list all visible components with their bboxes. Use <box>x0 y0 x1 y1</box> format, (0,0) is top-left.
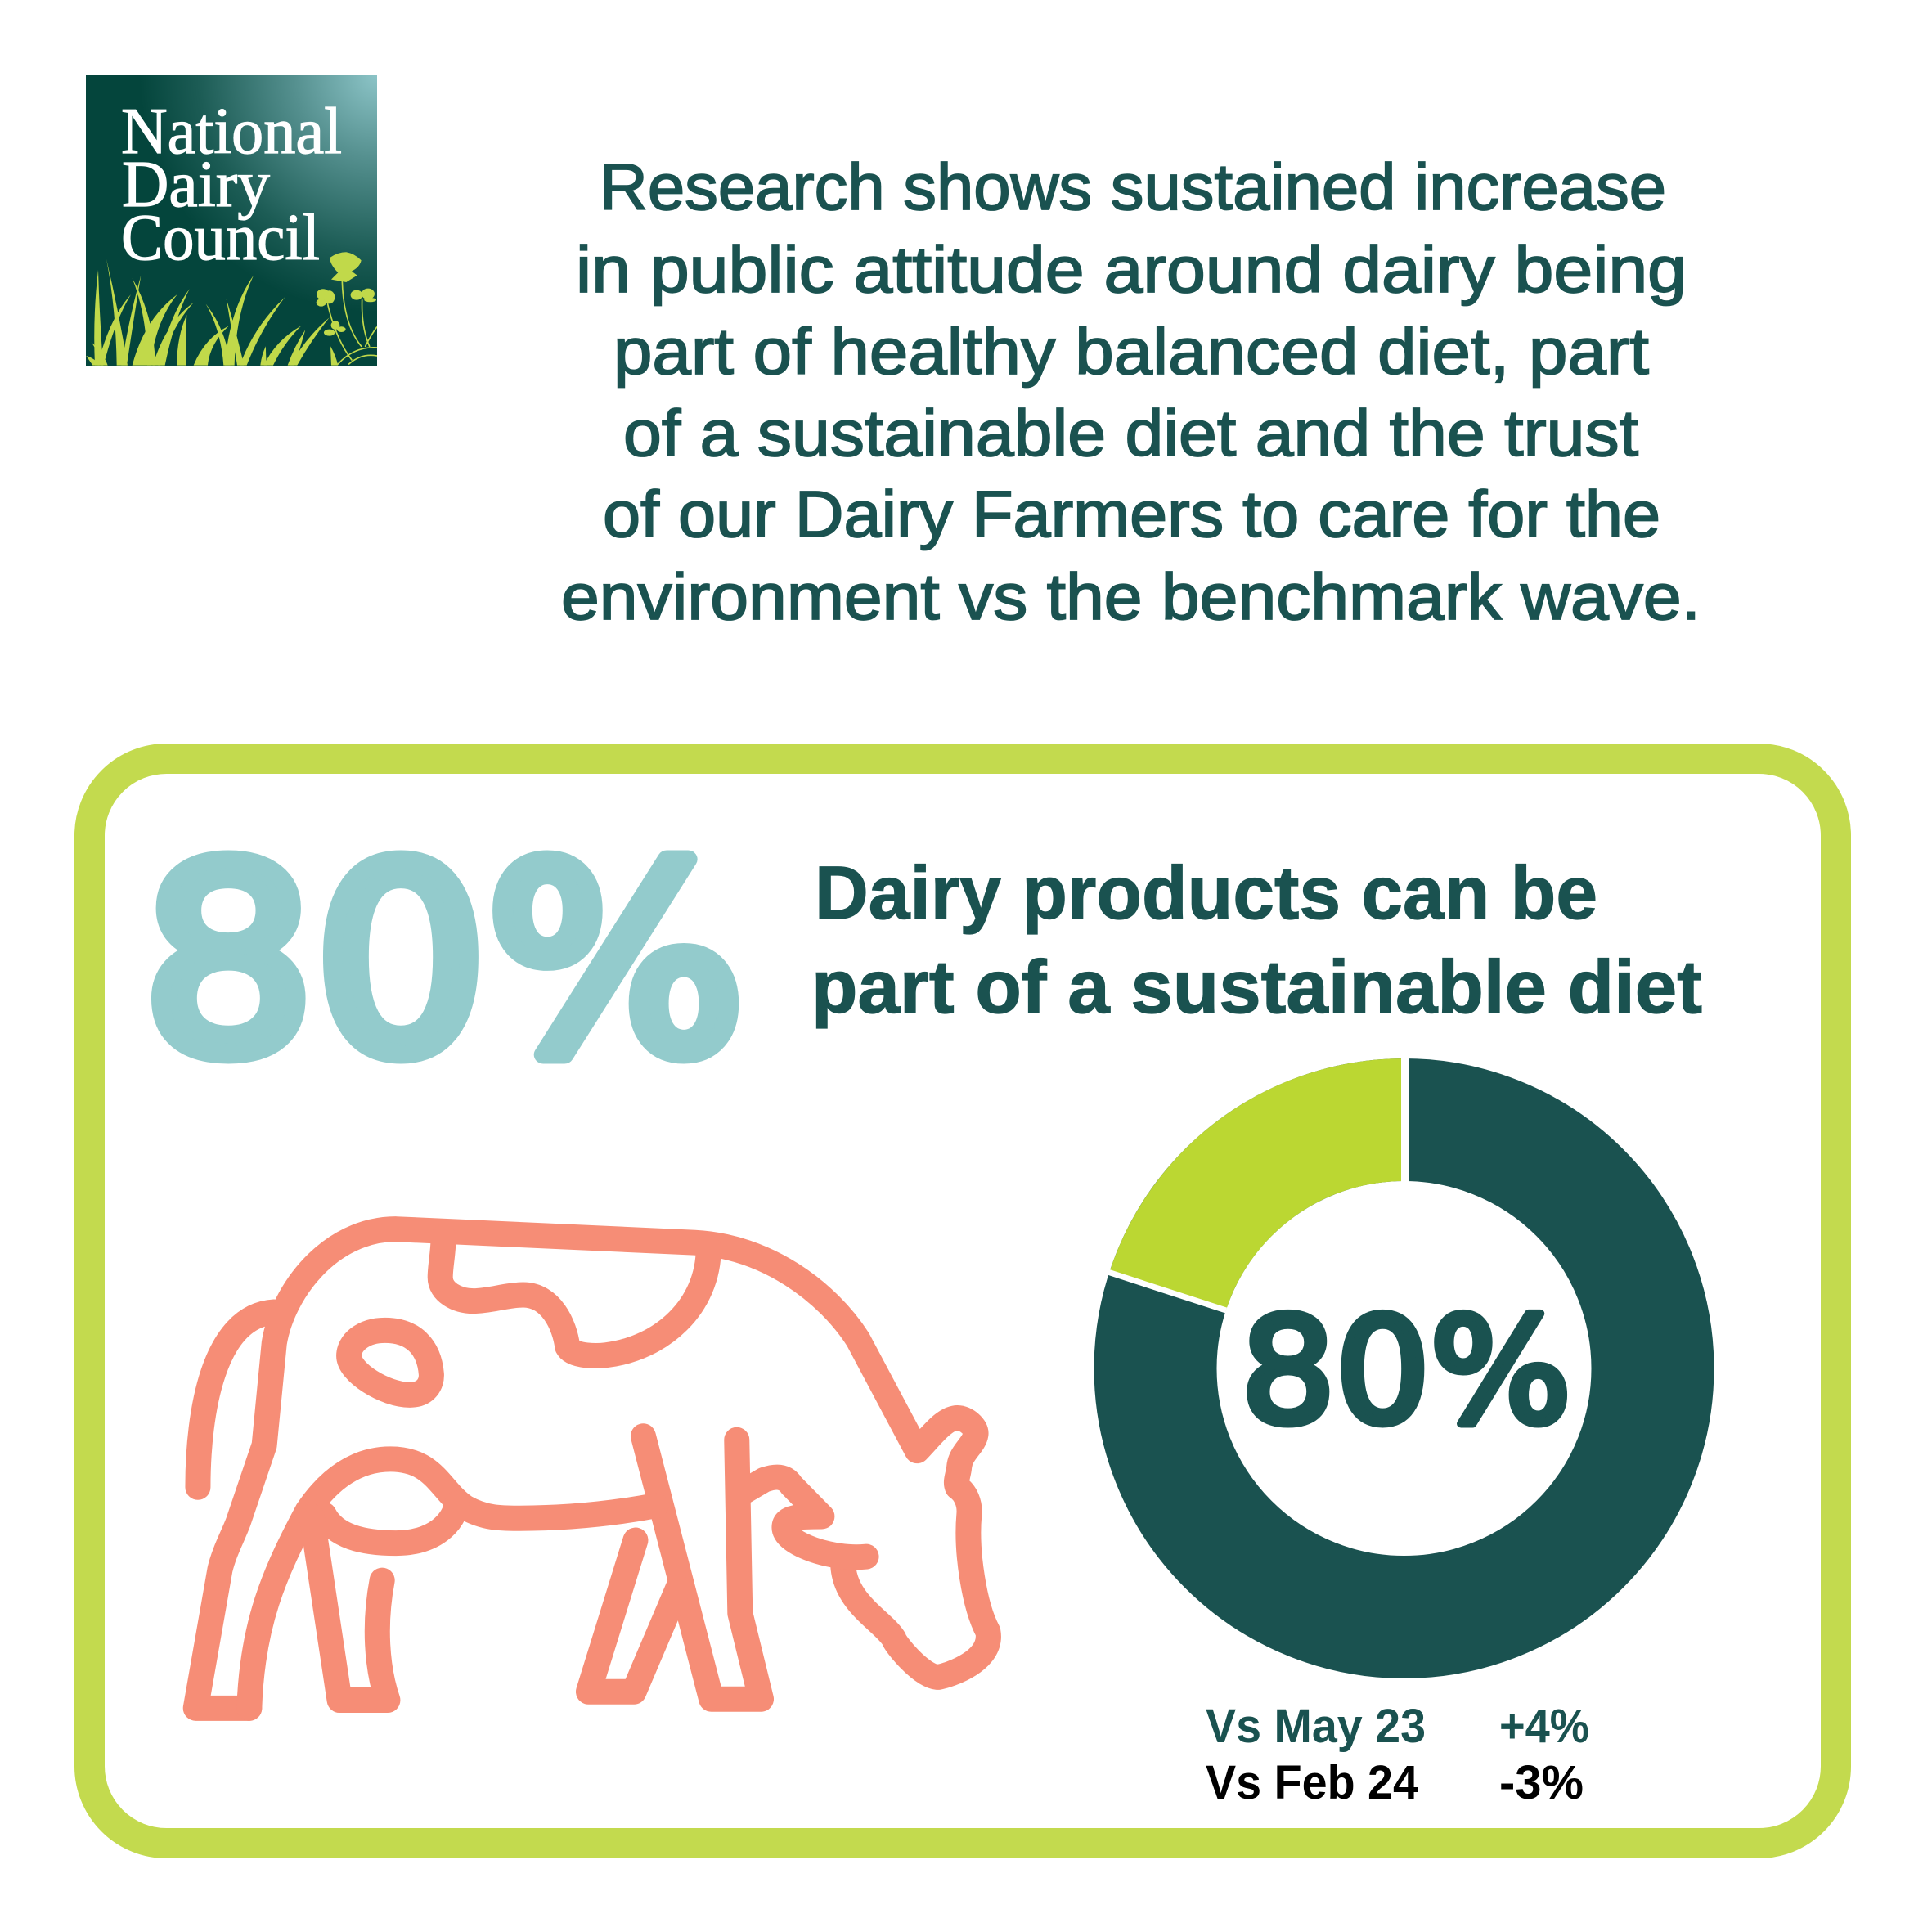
intro text: in public attitude around dairy being <box>576 233 1687 306</box>
comparison: vs May 23: Vs May 23 <box>1206 1700 1426 1753</box>
logo wordmark: Council <box>121 202 320 274</box>
logo wordmark <box>123 106 342 261</box>
panel heading: Dairy products can be <box>815 851 1597 935</box>
comparison: vs Feb 24 <box>1206 1756 1584 1809</box>
intro text <box>561 151 1701 633</box>
intro text: part of healthy balanced diet, part <box>613 315 1649 388</box>
donut chart: 80% <box>1100 1051 1652 1617</box>
intro text: of a sustainable diet and the trust <box>623 397 1638 470</box>
logo grass and clover <box>86 252 377 366</box>
intro text: of our Dairy Farmers to care for the <box>603 478 1660 550</box>
comparison: vs Feb 24: -3% <box>1499 1756 1584 1809</box>
big stat: 80%: 80% <box>142 811 744 1112</box>
intro text: Research shows sustained increase <box>600 151 1666 223</box>
donut segment: 80% dark <box>1155 1120 1652 1617</box>
intro text: environment vs the benchmark wave. <box>561 560 1701 633</box>
donut segment: 20% lime <box>1167 1120 1404 1292</box>
comparison: vs Feb 24: Vs Feb 24 <box>1206 1756 1418 1809</box>
panel heading: part of a sustainable diet <box>811 946 1702 1029</box>
icon: grazing cow <box>195 1229 988 1708</box>
comparison: vs May 23 <box>1206 1700 1589 1753</box>
logo wordmark: Dairy <box>122 149 270 221</box>
logo: National Dairy Council <box>86 75 377 366</box>
panel: sustainable diet statistic frame <box>90 759 1835 1844</box>
logo wordmark: National <box>121 96 342 168</box>
panel heading <box>811 851 1702 1029</box>
donut centre value: 80% <box>1241 1287 1571 1456</box>
comparison: vs May 23: +4% <box>1499 1700 1589 1753</box>
